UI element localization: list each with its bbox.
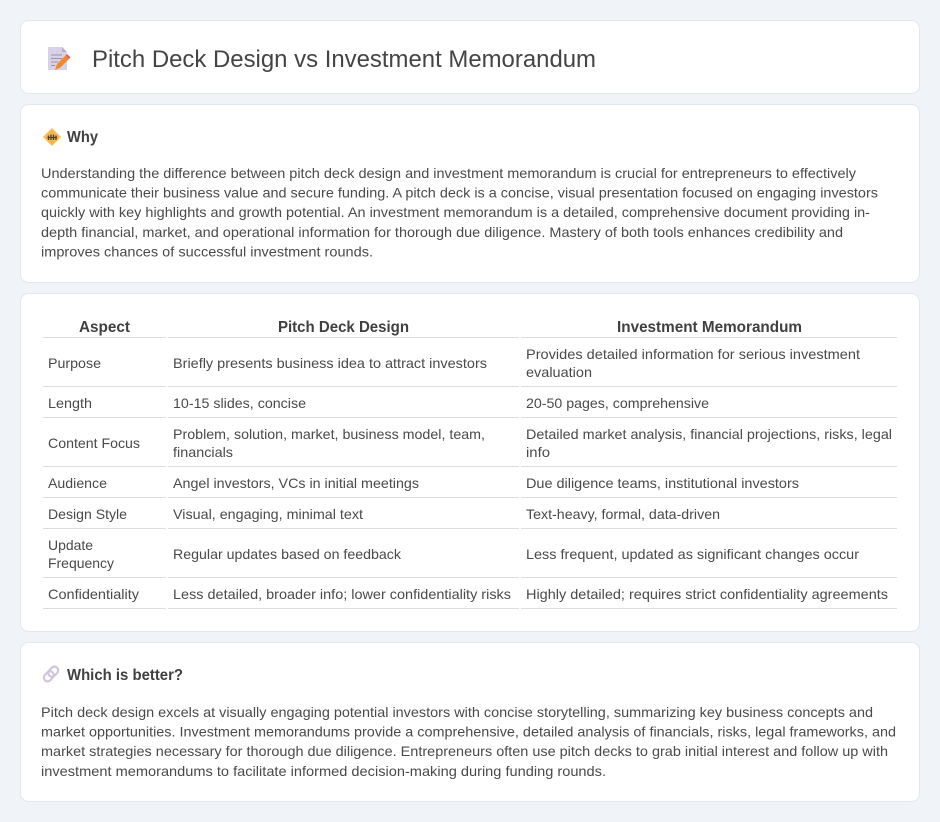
table header: Aspect: [79, 319, 131, 336]
row: update frequency: Less frequent, updated as significant changes occur: [526, 546, 859, 562]
row: content focus: info: [526, 444, 550, 460]
text block: which is better paragraph: market opportunities. Investment memorandums provide a comprehensive, detailed analysis of financials, risks, legal frameworks, and: [41, 724, 896, 740]
row: update frequency: [48, 537, 859, 571]
table header: Investment Memorandum: [617, 319, 802, 336]
panel: title header: [20, 20, 920, 94]
panel: comparison table: [20, 294, 920, 632]
text block: which is better paragraph: market strategies necessary for thorough due diligence. Entrepreneurs often use pitch decks to grab initial interest and follow up with: [41, 743, 888, 759]
text block: why paragraph: quickly with key highlights and growth potential. An investment memorandum is a detailed, comprehensive document providing in-: [41, 204, 870, 220]
text block: which is better paragraph: Pitch deck design excels at visually engaging potential investors with concise storytelling, summarizing key business concepts and: [41, 704, 873, 720]
text block: why paragraph: communicate their business value and secure funding. A pitch deck is a concise, visual presentation focused on engaging investors: [41, 184, 878, 200]
row: content focus: Content Focus: [48, 435, 140, 451]
row: confidentiality: Confidentiality: [48, 586, 139, 602]
text block: why paragraph: Understanding the difference between pitch deck design and investment memorandum is crucial for entrepreneurs to effectively: [41, 165, 856, 181]
row: design style: Design Style: [48, 506, 127, 522]
text block: why paragraph: [41, 165, 878, 260]
row: content focus: Detailed market analysis, financial projections, risks, legal: [526, 426, 892, 442]
text block: why paragraph: depth financial, market, and operational information for thorough due diligence. Mastery of both tools enhances credibility and: [41, 224, 843, 240]
row: update frequency: Update: [48, 537, 93, 553]
row: purpose: Briefly presents business idea to attract investors: [173, 355, 487, 371]
heading: why: Why: [67, 129, 98, 146]
row: confidentiality: Less detailed, broader info; lower confidentiality risks: [173, 586, 511, 602]
row: confidentiality: Highly detailed; requires strict confidentiality agreements: [526, 586, 888, 602]
row: update frequency: Regular updates based on feedback: [173, 546, 402, 562]
row: purpose: [48, 346, 860, 380]
row: content focus: financials: [173, 444, 233, 460]
row: audience: Angel investors, VCs in initial meetings: [173, 475, 419, 491]
row: design style: [48, 506, 720, 522]
heading: which is better: Which is better?: [67, 667, 183, 684]
row: design style: Text-heavy, formal, data-driven: [526, 506, 720, 522]
row: audience: Audience: [48, 475, 107, 491]
row: update frequency: Frequency: [48, 555, 114, 571]
row: design style: Visual, engaging, minimal text: [173, 506, 363, 522]
text block: why paragraph: improves chances of successful investment rounds.: [41, 244, 373, 260]
text block: which is better paragraph: investment memorandums to facilitate informed decision-making during funding rounds.: [41, 763, 606, 779]
title: Pitch Deck Design vs Investment Memorandum: [92, 46, 596, 73]
row: length: Length: [48, 395, 92, 411]
row: purpose: Provides detailed information for serious investment: [526, 346, 860, 362]
text block: which is better paragraph: [41, 704, 896, 779]
row: purpose: evaluation: [526, 364, 592, 380]
icon: document with pencil: [48, 47, 70, 70]
row: content focus: [48, 426, 892, 460]
row: content focus: Problem, solution, market, business model, team,: [173, 426, 485, 442]
row: confidentiality: [48, 586, 888, 602]
icon: link: [42, 665, 60, 683]
row: length: [48, 395, 709, 411]
row: length: 10-15 slides, concise: [173, 395, 306, 411]
table header: Pitch Deck Design: [278, 319, 409, 336]
row: audience: [48, 475, 799, 491]
row: audience: Due diligence teams, institutional investors: [526, 475, 799, 491]
icon: warning diamond: [44, 128, 60, 146]
panel: why: [20, 104, 920, 282]
row: purpose: Purpose: [48, 355, 101, 371]
row: length: 20-50 pages, comprehensive: [526, 395, 709, 411]
panel: which is better: [20, 642, 920, 802]
table header: [79, 319, 802, 336]
